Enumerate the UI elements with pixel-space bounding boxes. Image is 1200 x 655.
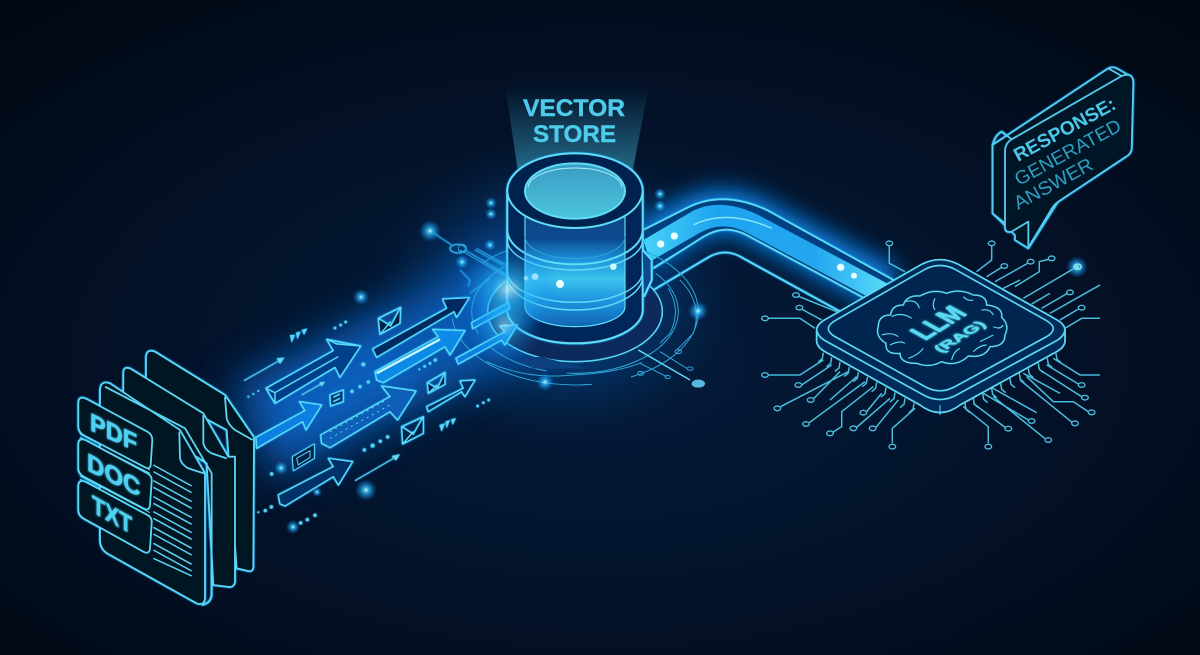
response text: ANSWER (1010, 154, 1097, 214)
front document (100, 382, 205, 604)
arrow: upper left (266, 339, 361, 403)
back document (146, 351, 254, 571)
tab: TXT (78, 481, 152, 553)
brain (878, 291, 1007, 365)
LLM (RAG) label: LLM (903, 302, 974, 344)
bubble face (1005, 75, 1133, 247)
LLM (RAG) label: (RAG) (930, 319, 990, 355)
arrow: textured (321, 386, 416, 448)
cylinder body (507, 191, 643, 343)
arrow: small (427, 380, 475, 412)
inner core (525, 191, 625, 327)
tab: PDF (78, 398, 152, 468)
ingestion arrows and data packets (244, 233, 517, 525)
chip body (817, 260, 1065, 412)
document stack (78, 351, 254, 605)
cylinder top (507, 153, 643, 228)
vector store title: VECTOR (523, 95, 625, 122)
dots (247, 321, 490, 525)
arrow: into store (456, 325, 517, 364)
LLM chip circuit pins (762, 241, 1100, 449)
tab: DOC (78, 439, 152, 509)
arrow: lower (278, 458, 353, 506)
vector store title: STORE (533, 121, 616, 148)
chevrons (290, 328, 456, 432)
response text: GENERATED (1011, 116, 1125, 190)
bubble depth (993, 67, 1133, 248)
beam from documents (256, 402, 322, 448)
glowing nodes (274, 188, 1088, 534)
document tab labels: PDF (90, 408, 137, 458)
response speech bubble (993, 67, 1133, 248)
data pipe from vector store to LLM (640, 199, 893, 313)
document tab labels: TXT (92, 490, 132, 541)
vector store cylinder (507, 153, 652, 343)
node traces (434, 233, 507, 293)
middle document (123, 368, 235, 587)
thin arrows (244, 359, 398, 481)
arrow: upper outline (373, 298, 469, 357)
vector store title (523, 95, 625, 148)
document tab labels: DOC (87, 448, 140, 503)
text lines (153, 465, 192, 576)
LLM chip (817, 260, 1065, 415)
document tab labels (87, 408, 140, 541)
arrow: into store upper (472, 303, 510, 329)
vector store label beam (505, 85, 649, 185)
LLM (RAG) label (903, 302, 990, 355)
response text: RESPONSE: (1010, 94, 1120, 166)
response text (1010, 94, 1125, 214)
base rings and circuit traces (452, 238, 705, 388)
arrow: bright (375, 329, 465, 383)
chip inner plate (828, 265, 1053, 391)
envelopes (378, 307, 401, 334)
